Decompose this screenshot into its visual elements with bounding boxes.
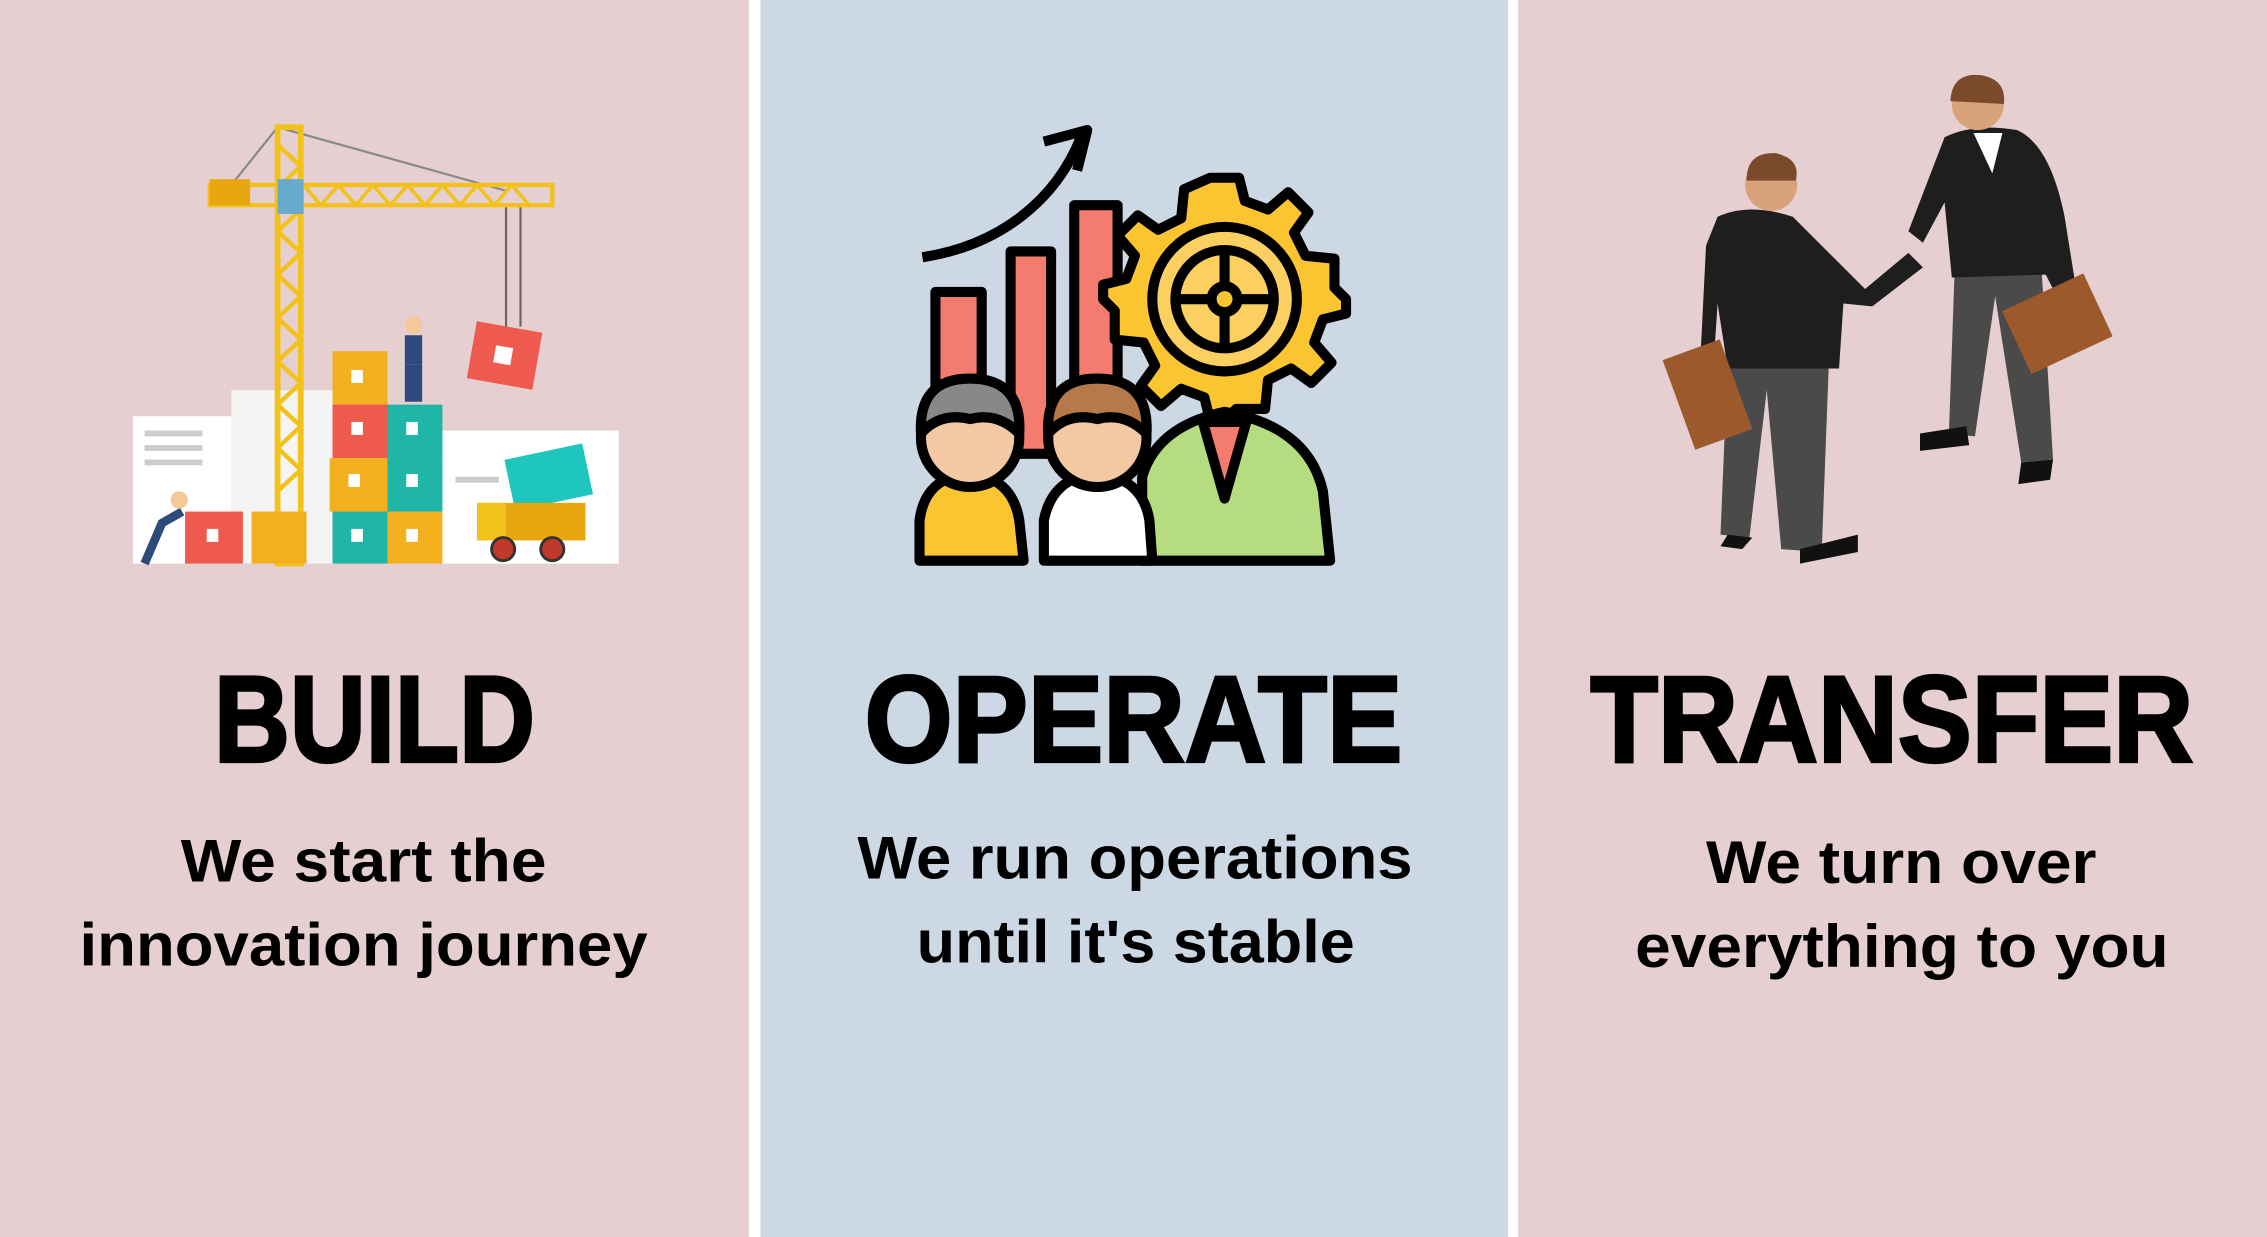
- title: TRANSFER: TRANSFER: [1590, 652, 2193, 789]
- title: BUILD: BUILD: [214, 652, 535, 789]
- panel: transfer: [1518, 0, 2267, 1237]
- text: build description: innovation journey: [80, 910, 648, 978]
- icon: growth chart, gear and team: [920, 130, 1346, 561]
- title: OPERATE: OPERATE: [865, 652, 1402, 789]
- text: build description: [80, 827, 648, 978]
- text: transfer description: We turn over: [1706, 828, 2096, 896]
- text: operate description: until it's stable: [917, 907, 1355, 975]
- text: transfer description: [1635, 828, 2169, 980]
- icon: construction crane with blocks: [133, 127, 619, 564]
- text: operate description: We run operations: [857, 824, 1413, 892]
- panel: build: [0, 0, 749, 1237]
- panel: operate: [760, 0, 1508, 1237]
- icon: businessmen handshake: [1663, 75, 2113, 564]
- text: build description: We start the: [181, 827, 547, 895]
- text: transfer description: everything to you: [1635, 912, 2169, 980]
- text: operate description: [857, 824, 1413, 975]
